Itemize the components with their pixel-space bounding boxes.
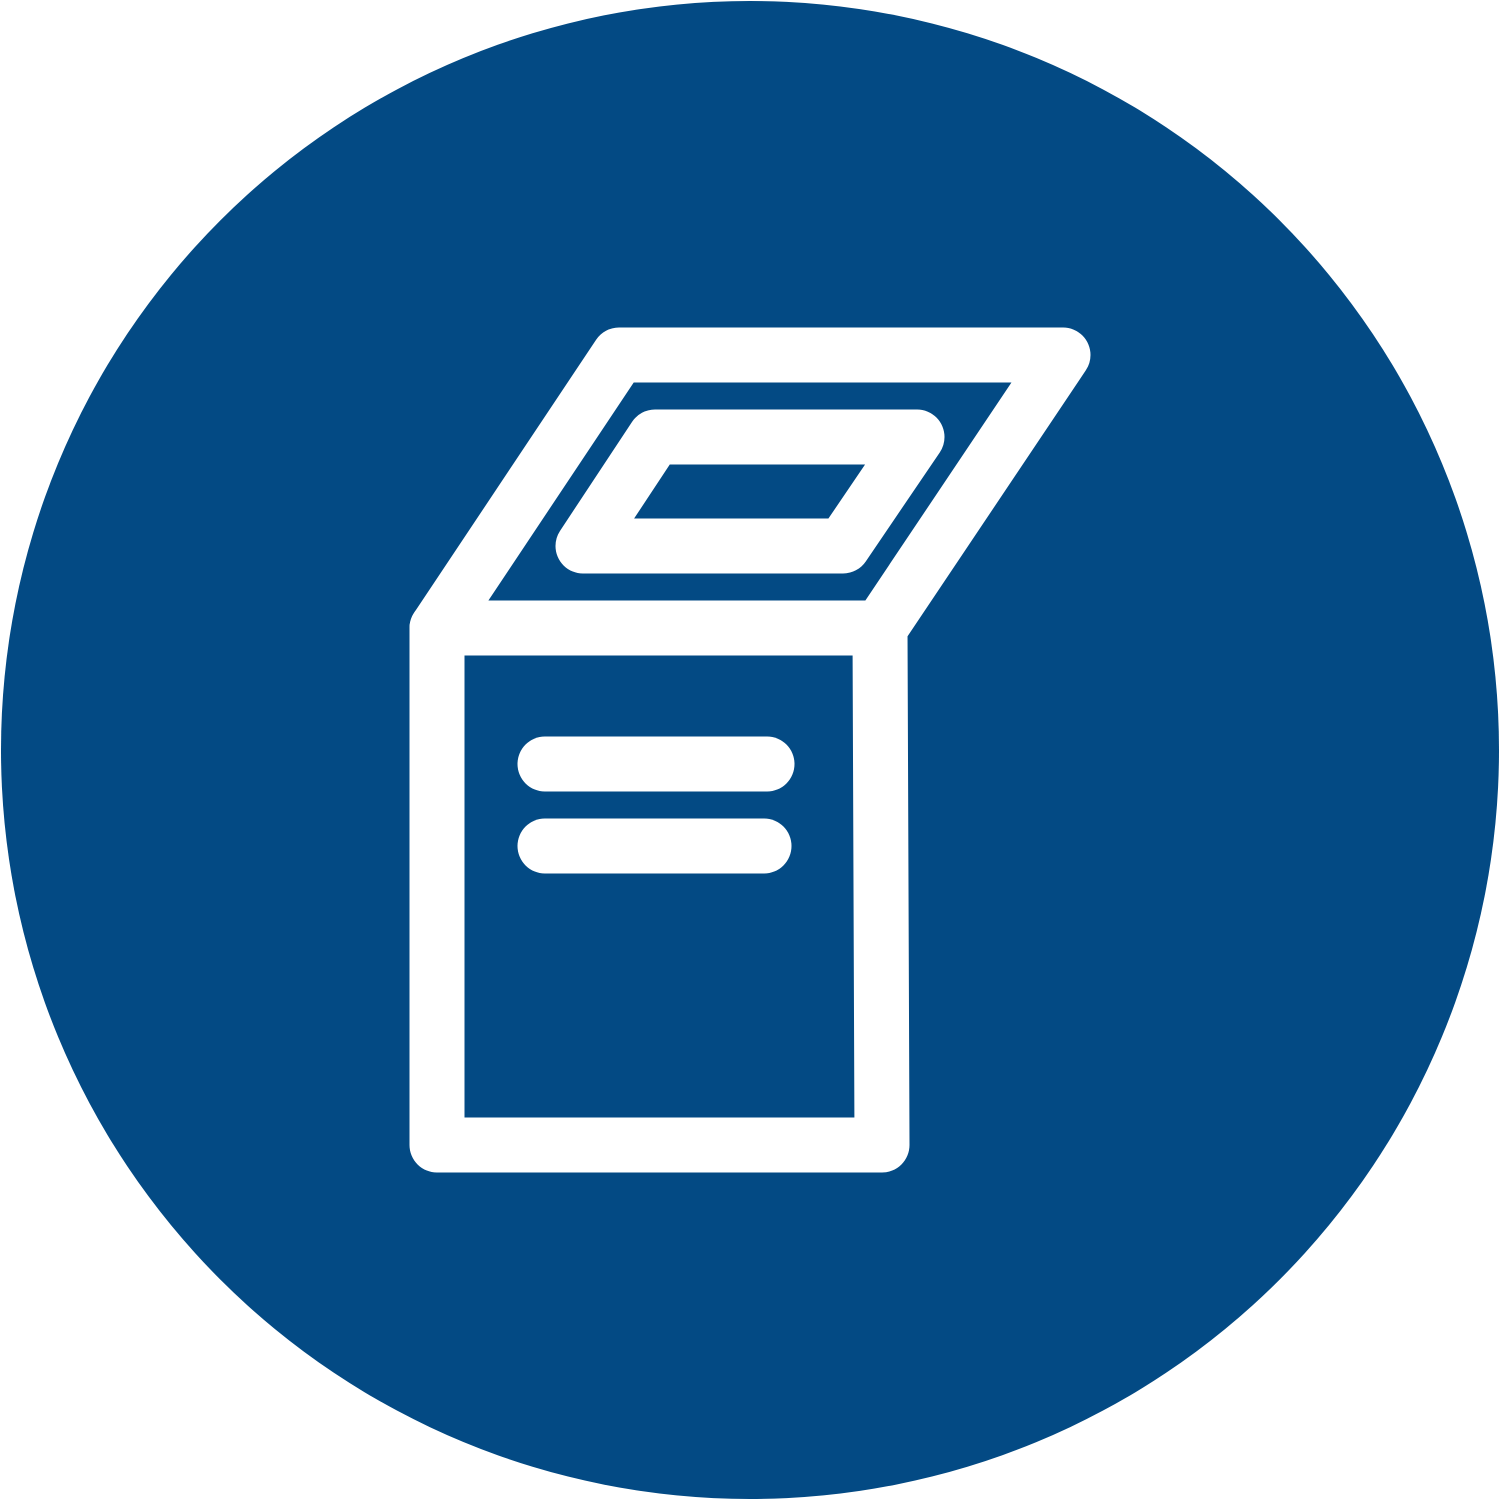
kiosk screen: [583, 437, 917, 546]
kiosk top panel: [437, 355, 1063, 628]
kiosk body: [437, 628, 882, 1145]
kiosk: [437, 355, 1063, 1145]
kiosk slot lines: [545, 764, 767, 846]
